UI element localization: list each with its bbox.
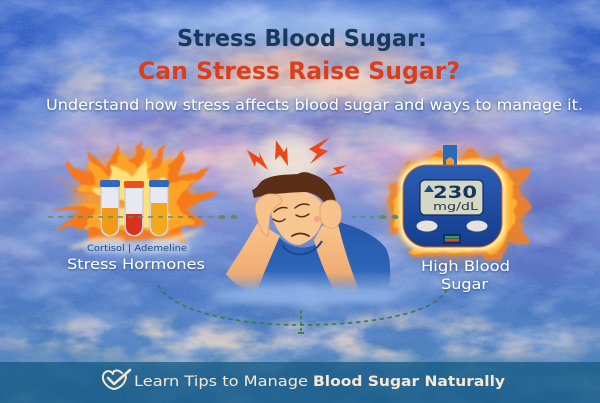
wisps under tubes <box>66 226 206 252</box>
icon: test tube adrenaline <box>124 181 144 236</box>
flame glow <box>389 153 521 257</box>
label: high blood sugar: High Blood <box>421 259 510 275</box>
icon: lightning bolt 3 <box>309 137 330 164</box>
label: high blood sugar <box>421 259 510 293</box>
reading value: 230 <box>433 183 477 203</box>
left hand <box>255 194 282 236</box>
collar <box>282 241 322 254</box>
group: blood sugar meter <box>386 145 534 293</box>
icon: heart check <box>103 370 130 389</box>
meter glow outline <box>399 161 506 251</box>
shirt <box>254 222 390 292</box>
meter button left <box>416 220 438 232</box>
footer text regular: Learn Tips to Manage <box>134 374 308 390</box>
right hand <box>320 200 342 228</box>
icon: lightning bolt 2 <box>275 140 288 166</box>
cheek blush <box>314 216 320 222</box>
icon: flames <box>386 148 534 262</box>
soft halo <box>260 130 320 190</box>
icon: test tube third <box>149 180 169 236</box>
icon: lightning bolt 1 <box>247 150 268 170</box>
icon: flames <box>44 138 218 244</box>
hair <box>252 172 336 208</box>
meter screen <box>420 180 483 215</box>
icon: lightning bolt 4 <box>328 165 347 176</box>
left arm <box>226 222 280 294</box>
title line 1: Stress Blood Sugar: <box>177 26 427 52</box>
subtitle: Understand how stress affects blood sugar and ways to manage it. <box>46 96 583 114</box>
flame glow <box>76 156 192 240</box>
group: stressed person <box>210 130 400 305</box>
meter body <box>403 165 502 247</box>
footer bar <box>0 362 600 403</box>
title line 2: Can Stress Raise Sugar? <box>138 57 460 85</box>
face <box>268 191 323 245</box>
footer text bold: Blood Sugar Naturally <box>313 374 506 390</box>
title <box>138 26 460 85</box>
meter button right <box>466 220 488 232</box>
arrow: person to meter <box>352 215 398 219</box>
label: stress hormones: Stress Hormones <box>67 257 205 273</box>
label: cortisol adrenaline: Cortisol | Ademeline <box>87 244 188 254</box>
arrow: hormones to person <box>48 215 238 219</box>
arrow: feedback curve <box>158 285 447 333</box>
icon: test strip <box>443 145 457 168</box>
reading unit: mg/dL <box>433 201 478 213</box>
label backdrop <box>84 241 190 254</box>
meter port <box>443 234 461 244</box>
face features <box>273 204 309 236</box>
group: stress hormones <box>44 138 218 273</box>
right arm <box>314 224 360 294</box>
label: high blood sugar: Sugar <box>441 277 488 293</box>
cloud covering lower body <box>210 287 400 305</box>
icon: test tube cortisol <box>100 180 120 236</box>
icon: up triangle <box>424 185 434 192</box>
